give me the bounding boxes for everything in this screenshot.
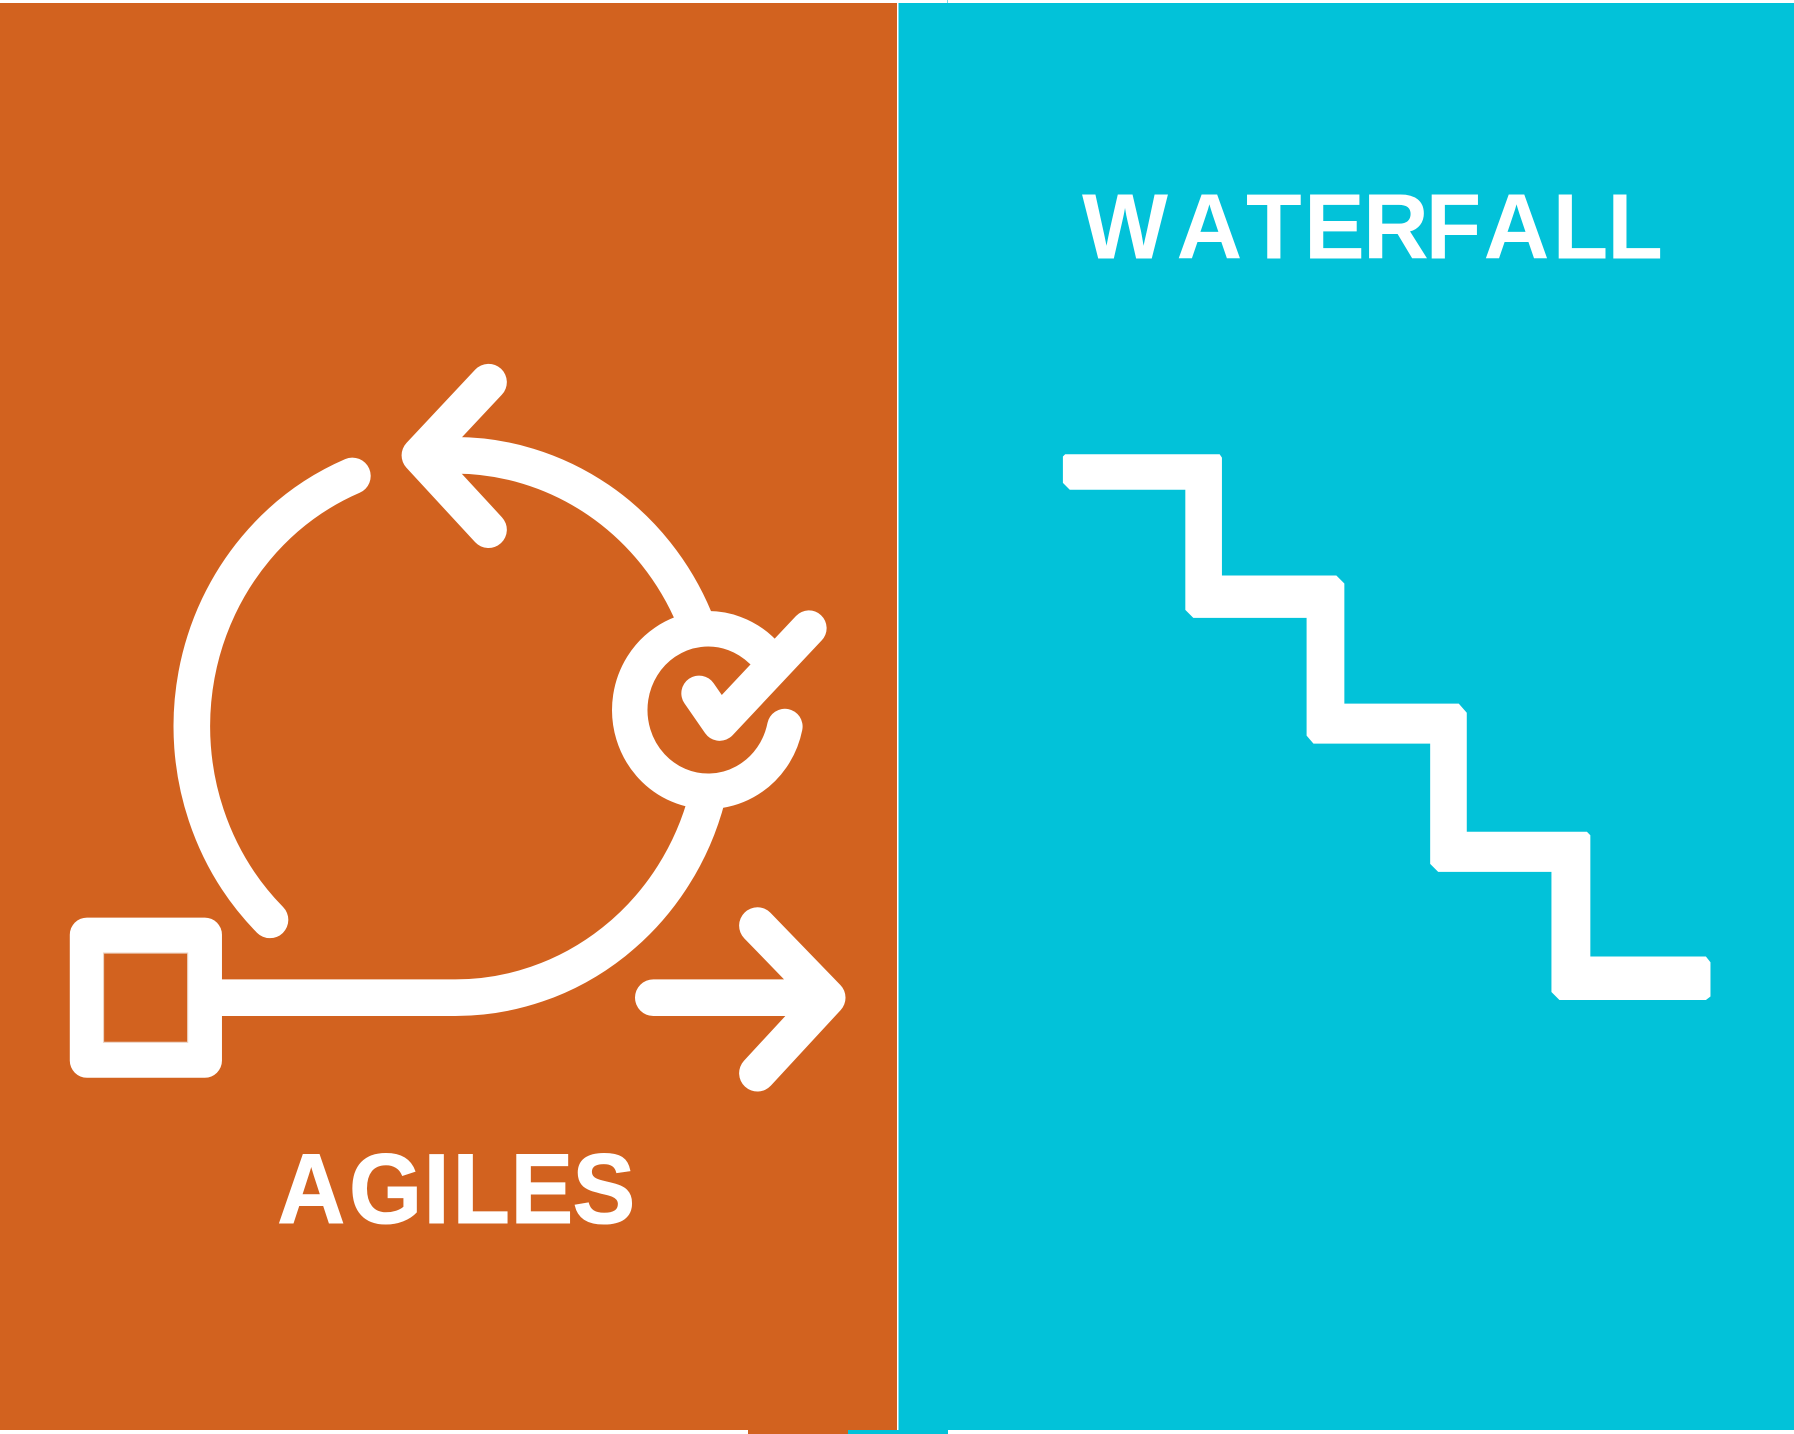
left arc: [192, 476, 352, 920]
icon: check mark: [699, 628, 809, 723]
icon: descending staircase: [1063, 454, 1710, 1000]
icon: agile iteration loop: [70, 382, 827, 1078]
heading: waterfall: WATERFALL: [1082, 174, 1663, 279]
heading: agiles: AGILES: [277, 1135, 635, 1245]
icon: checkpoint circle: [630, 629, 785, 791]
panel: waterfall: [848, 0, 1794, 1434]
icon: start square: [70, 918, 222, 1078]
loop path from square to checkpoint: [217, 797, 707, 998]
loop path from checkpoint to top arrow: [423, 455, 694, 619]
icon: exit arrow: [653, 926, 827, 1073]
icon: top arrow head: [420, 382, 489, 530]
panel: agiles: [0, 3, 897, 1434]
